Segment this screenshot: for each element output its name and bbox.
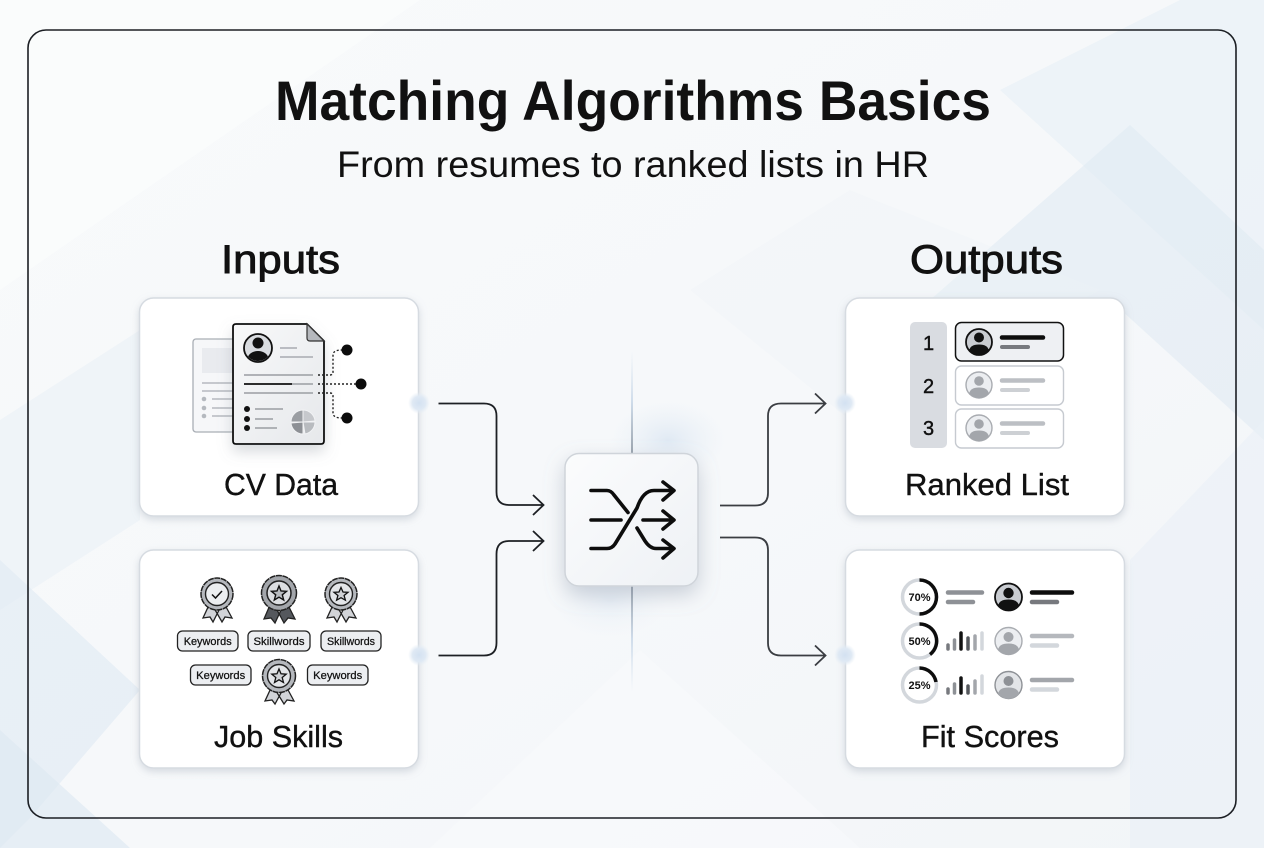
- icon: badge star: [325, 578, 357, 622]
- row 2: [956, 366, 1064, 405]
- title: Matching Algorithms Basics: [275, 69, 991, 132]
- connector glow dots: [408, 392, 856, 666]
- icon: back document: [193, 339, 253, 432]
- label: job skills: Job Skills: [214, 719, 343, 754]
- label: ranked list: Ranked List: [905, 467, 1069, 502]
- rank column: [910, 322, 947, 448]
- row: 70% score: 70%: [908, 592, 931, 604]
- row 1: [956, 322, 1064, 361]
- panel: job skills: [140, 550, 418, 768]
- icon: badge star lower: [262, 660, 296, 704]
- icon: shuffle arrows: [591, 482, 674, 558]
- tag: skillwords: [248, 631, 310, 651]
- row: 50% score: [902, 624, 1072, 658]
- panel: cv data: [140, 298, 418, 516]
- arrow: matcher to ranked list: [720, 394, 826, 506]
- tag: keywords: [190, 665, 251, 685]
- row: 70% score: [902, 580, 1072, 614]
- label: cv data: CV Data: [224, 467, 339, 502]
- tag: keywords: [308, 665, 368, 685]
- row: 25% score: 25%: [908, 680, 931, 692]
- heading: outputs: Outputs: [910, 238, 1063, 282]
- label: fit scores: Fit Scores: [921, 719, 1059, 754]
- heading: inputs: Inputs: [221, 238, 340, 282]
- tag: skillwords: [321, 631, 381, 651]
- panel: fit scores: [846, 550, 1124, 768]
- arrow: cv data to matcher: [438, 404, 544, 515]
- icon: badge check: [201, 578, 233, 622]
- panel: matching engine: [565, 454, 698, 586]
- tag: keywords: Keywords: [313, 670, 363, 682]
- row 3: [956, 409, 1064, 448]
- tag: keywords: Keywords: [196, 670, 246, 682]
- subtitle: From resumes to ranked lists in HR: [337, 144, 929, 185]
- row: 25% score: [902, 668, 1072, 702]
- icon: badge star dark: [262, 576, 296, 623]
- icon: resume document: [233, 324, 324, 444]
- icon: pie chart: [291, 410, 315, 434]
- tag: skillwords: Skillwords: [327, 636, 375, 648]
- rank column: 1: [923, 333, 934, 355]
- connector dots: [318, 344, 366, 424]
- tag: keywords: [178, 631, 238, 651]
- arrow: matcher to fit scores: [720, 538, 826, 666]
- rank column: 2: [923, 376, 934, 398]
- panel: ranked list: [846, 298, 1124, 516]
- tag: keywords: Keywords: [184, 636, 232, 648]
- centre vertical divider: [552, 350, 726, 692]
- rank column: 3: [923, 418, 934, 440]
- arrow: job skills to matcher: [438, 531, 544, 656]
- row: 50% score: 50%: [908, 636, 931, 648]
- tag: skillwords: Skillwords: [254, 636, 305, 648]
